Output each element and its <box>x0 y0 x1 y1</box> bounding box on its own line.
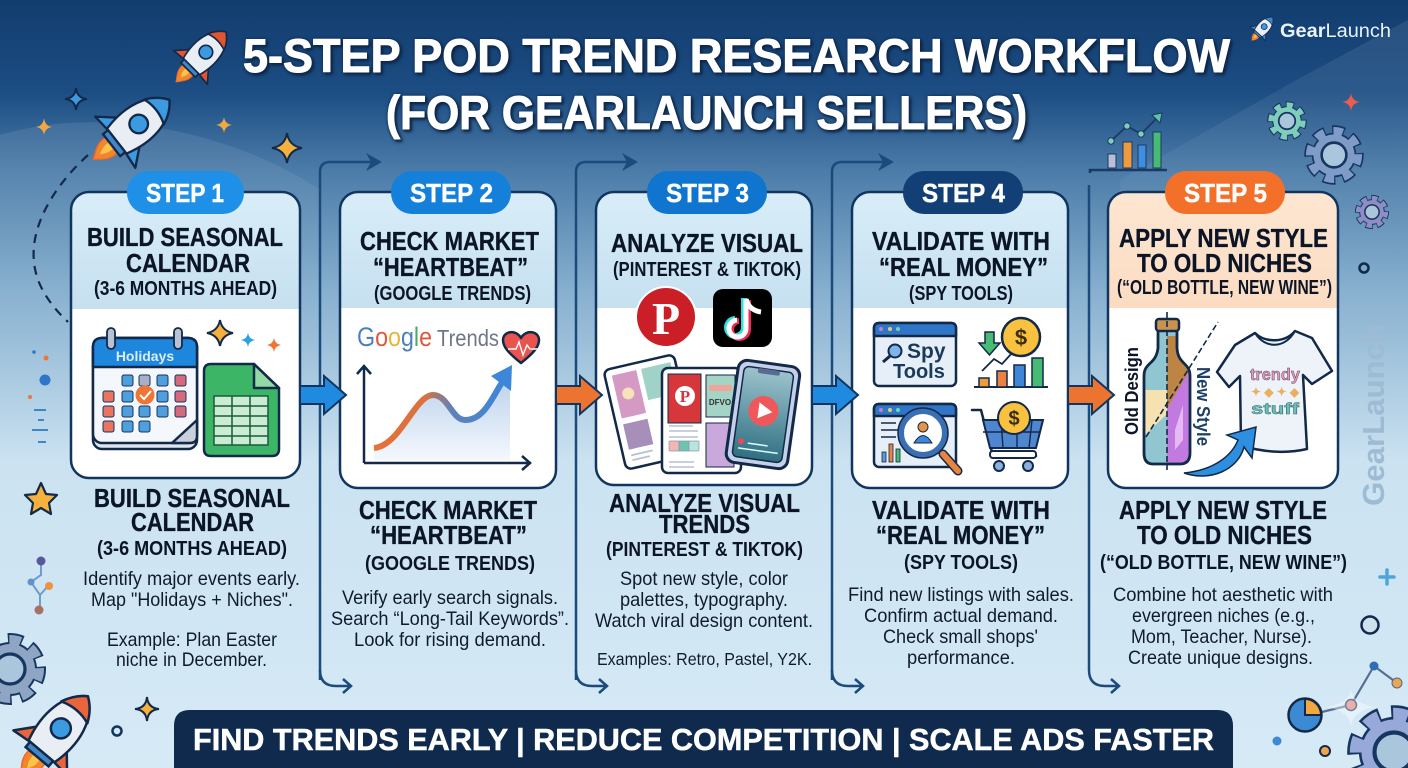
text block: step 1 <box>83 485 300 671</box>
card heading 5 <box>1117 225 1332 299</box>
title: (FOR GEARLAUNCH SELLERS) <box>386 86 1027 139</box>
icon: large rocket <box>73 74 190 185</box>
text block: step 1: Identify major events early. <box>83 568 300 590</box>
text block: step 5: evergreen niches (e.g., <box>1132 605 1315 627</box>
icon: t-shirt: trendy <box>1250 365 1301 384</box>
logo: GearLaunch <box>1244 10 1391 48</box>
text block: step 3: TRENDS <box>659 511 750 539</box>
step badge 1: STEP 1 <box>146 178 224 208</box>
icon: left tablet with pins <box>603 354 697 470</box>
card heading 2: (GOOGLE TRENDS) <box>374 283 531 305</box>
card heading 5: APPLY NEW STYLE <box>1119 225 1328 253</box>
step badge 3: STEP 3 <box>666 178 749 208</box>
icon: gears <box>1272 106 1385 225</box>
text block: step 2: Verify early search signals. <box>342 587 558 609</box>
text block: step 5: Create unique designs. <box>1128 647 1313 669</box>
arrow: step 1 to 2 <box>300 376 346 414</box>
icon: center board <box>662 368 741 473</box>
icon: title rocket <box>159 15 243 99</box>
icon: heartbeat <box>503 332 544 363</box>
card heading 1 <box>87 224 283 300</box>
icon: cart with coin <box>972 402 1043 471</box>
step badge 5 <box>1165 171 1285 214</box>
card heading 2 <box>360 228 539 305</box>
icon: center board: DFVO <box>709 398 731 407</box>
text block: step 4: VALIDATE WITH <box>872 497 1050 525</box>
step badge 3 <box>647 171 767 214</box>
text block: step 2 <box>331 497 569 651</box>
card heading 1: BUILD SEASONAL <box>87 224 283 252</box>
text block: step 5 <box>1100 497 1347 669</box>
icon: research window <box>874 404 958 471</box>
card heading 4 <box>872 228 1050 305</box>
decorative icons: left side <box>0 350 159 768</box>
text block: step 4 <box>848 497 1074 669</box>
text block: step 5: TO OLD NICHES <box>1137 522 1312 550</box>
panel: step 5 card <box>1108 171 1338 488</box>
chart: trend line <box>357 365 530 470</box>
icon: bottom-right gear <box>1359 717 1408 768</box>
step badge 4: STEP 4 <box>922 178 1005 208</box>
text block: step 4: Check small shops' <box>883 626 1038 648</box>
card heading 5: TO OLD NICHES <box>1137 250 1312 278</box>
card heading 4: VALIDATE WITH <box>872 228 1050 256</box>
icon: bottle <box>1144 312 1218 470</box>
arrow: bottle to shirt <box>1184 427 1256 476</box>
card heading 3: (PINTEREST & TIKTOK) <box>613 259 801 281</box>
text block: step 3: Examples: Retro, Pastel, Y2K. <box>597 649 812 669</box>
card heading 5: (“OLD BOTTLE, NEW WINE”) <box>1117 277 1332 299</box>
icon: Pinterest: P <box>652 293 680 344</box>
panel: step 2 card <box>340 171 556 488</box>
logo: Google Trends <box>357 322 499 352</box>
label: Old Design: Old Design <box>1122 347 1142 435</box>
icon: phone with video <box>725 359 801 470</box>
title <box>159 15 1231 139</box>
icon: cart with coin: $ <box>1008 408 1020 430</box>
text block: step 1: Example: Plan Easter <box>107 629 277 651</box>
logo: Google Trends: Trends <box>437 325 499 351</box>
panel: step 1 card <box>71 171 300 478</box>
text block: step 4: performance. <box>907 647 1015 669</box>
card heading 2: CHECK MARKET <box>360 228 539 256</box>
text block: step 1: niche in December. <box>116 649 267 671</box>
text block: step 2: “HEARTBEAT” <box>370 522 527 550</box>
text block: step 3: (PINTEREST & TIKTOK) <box>606 539 803 561</box>
text block: step 3: ANALYZE VISUAL <box>609 490 800 518</box>
card heading 4: (SPY TOOLS) <box>909 283 1013 305</box>
bottom banner: FIND TRENDS EARLY | REDUCE COMPETITION | SCALE ADS FASTER <box>193 722 1214 757</box>
card heading 2: “HEARTBEAT” <box>373 254 528 282</box>
text block: step 5: Combine hot aesthetic with <box>1113 584 1333 606</box>
arrow: step 4 to 5 <box>1068 376 1114 414</box>
icon: chart on shelf <box>1090 113 1167 173</box>
text block: step 1: (3-6 MONTHS AHEAD) <box>97 538 287 560</box>
watermark: GearLaunch: GearLaunch <box>1356 324 1391 506</box>
panel: step 3 card <box>596 171 812 485</box>
logo: GearLaunch: GearLaunch <box>1280 21 1391 42</box>
decorative icons: upper left <box>34 74 302 322</box>
icon: t-shirt: ✦ ◆ ✦ ◆ <box>1251 385 1300 399</box>
text block: step 5: (“OLD BOTTLE, NEW WINE”) <box>1100 552 1347 574</box>
text block: step 3: Spot new style, color <box>620 568 788 590</box>
step badge 5: STEP 5 <box>1184 178 1267 208</box>
arrow: step 3 to 4 <box>812 376 858 414</box>
text block: step 1: Map "Holidays + Niches". <box>91 589 293 611</box>
icon: TikTok <box>713 289 772 347</box>
card heading 3 <box>611 230 803 281</box>
text block: step 3 <box>595 490 813 669</box>
icon: t-shirt <box>1217 331 1332 452</box>
decorative icons: upper right <box>1090 93 1385 272</box>
step badge 2: STEP 2 <box>410 178 493 208</box>
text block: step 3: Watch viral design content. <box>595 610 813 632</box>
icon: center board: P <box>680 387 690 406</box>
icon: Pinterest <box>635 286 697 348</box>
text block: step 4: Find new listings with sales. <box>848 584 1074 606</box>
card heading 4: “REAL MONEY” <box>879 254 1048 282</box>
text block: step 1: CALENDAR <box>131 509 254 537</box>
icon: Spy Tools window: Spy <box>907 340 946 363</box>
text block: step 4: “REAL MONEY” <box>876 522 1045 550</box>
bottom banner <box>174 710 1233 768</box>
text block: step 2: (GOOGLE TRENDS) <box>365 553 535 575</box>
arrow: step 2 to 3 <box>556 376 602 414</box>
text block: step 5: Mom, Teacher, Nurse). <box>1131 626 1312 648</box>
text block: step 3: palettes, typography. <box>620 589 788 611</box>
icon: calendar: Holidays <box>116 348 174 364</box>
icon: bottom-left gear <box>0 642 37 696</box>
title: 5-STEP POD TREND RESEARCH WORKFLOW <box>243 29 1231 82</box>
icon: Spy Tools window <box>874 323 956 386</box>
text block: step 5: APPLY NEW STYLE <box>1119 497 1327 525</box>
icon: network <box>28 556 53 614</box>
step badge 1 <box>127 171 244 214</box>
panel: step 4 card <box>852 171 1068 488</box>
label: New Style: New Style <box>1193 367 1213 446</box>
icon: t-shirt: stuff <box>1251 401 1300 418</box>
step badge 2 <box>391 171 511 214</box>
logo: Google Trends: Google <box>357 322 432 352</box>
text block: step 1: BUILD SEASONAL <box>94 485 290 513</box>
icon: sparkles <box>207 320 281 352</box>
decorative icons: bottom right <box>1272 570 1408 768</box>
card heading 3: ANALYZE VISUAL <box>611 230 803 258</box>
text block: step 2: Search “Long-Tail Keywords”. <box>331 608 569 630</box>
icon: sales chart with coin: $ <box>1015 325 1027 350</box>
flow connectors <box>320 153 1119 693</box>
icon: pie chart <box>1288 698 1322 732</box>
card heading 1: CALENDAR <box>126 250 250 278</box>
icon: bottom-left rocket <box>0 674 115 768</box>
card heading 1: (3-6 MONTHS AHEAD) <box>94 278 277 300</box>
text block: step 2: Look for rising demand. <box>354 629 546 651</box>
icon: sales chart with coin <box>974 318 1048 387</box>
icon: Spy Tools window: Tools <box>893 361 945 383</box>
text block: step 4: (SPY TOOLS) <box>904 552 1018 574</box>
icon: star <box>25 483 57 514</box>
text block: step 2: CHECK MARKET <box>359 497 537 525</box>
icon: calendar <box>93 328 197 449</box>
step badge 4 <box>903 171 1023 214</box>
icon: spreadsheet <box>204 364 279 456</box>
text block: step 4: Confirm actual demand. <box>864 605 1058 627</box>
